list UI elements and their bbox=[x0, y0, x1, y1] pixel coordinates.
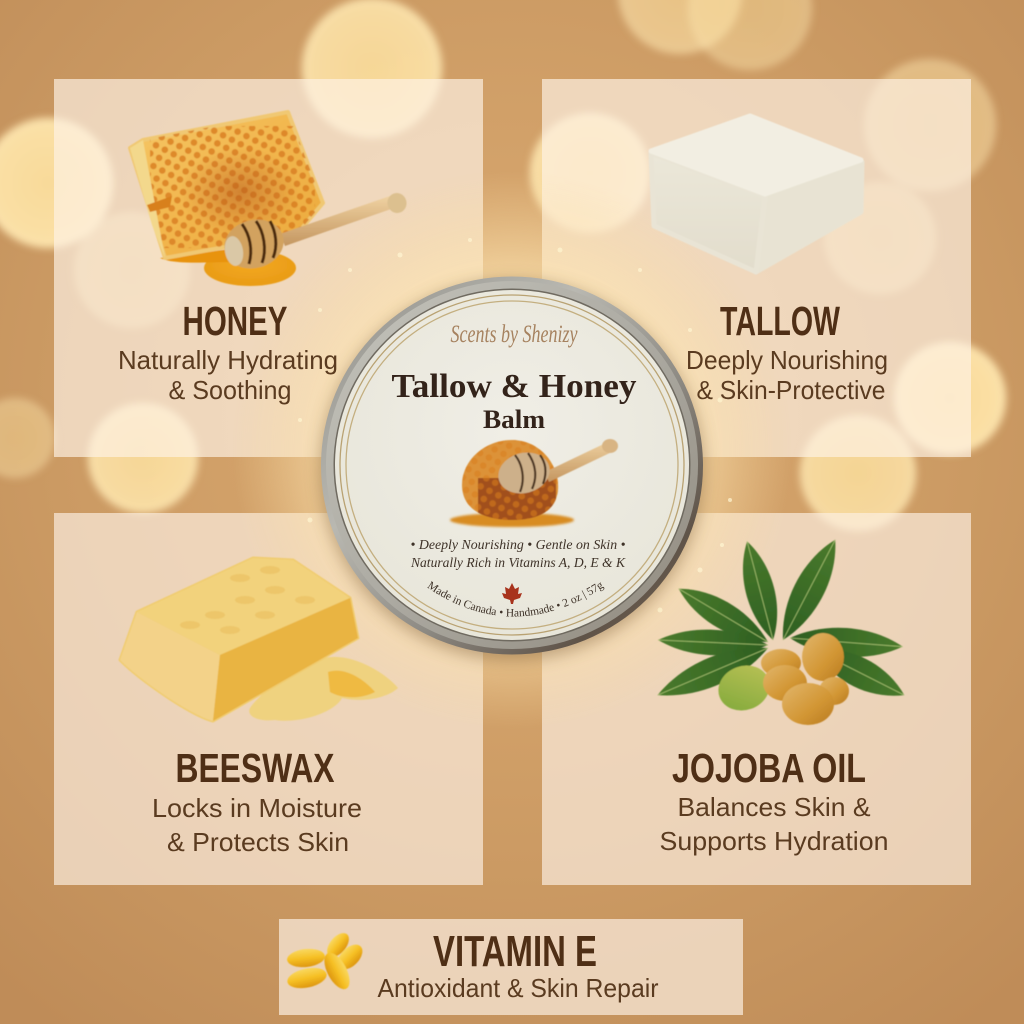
tin rim bbox=[321, 276, 703, 654]
label icon: honeycomb and dipper bbox=[450, 439, 618, 527]
icon: beeswax block bbox=[120, 558, 398, 721]
icon: jojoba leaves and nuts bbox=[652, 533, 911, 725]
text: honey benefit: & Soothing bbox=[168, 375, 292, 405]
text: tallow benefit: & Skin-Protective bbox=[696, 375, 886, 405]
tin label bbox=[335, 290, 689, 640]
heading: beeswax: BEESWAX bbox=[176, 745, 334, 791]
icon: vitamin E capsules bbox=[285, 929, 367, 993]
center glow bbox=[232, 170, 792, 730]
text: tallow benefit: Deeply Nourishing bbox=[686, 345, 888, 375]
label benefits: • Deeply Nourishing • Gentle on Skin • bbox=[410, 537, 626, 552]
label title: Tallow & Honey bbox=[392, 368, 636, 405]
icon: tallow block bbox=[651, 116, 862, 272]
text: beeswax benefit: Locks in Moisture bbox=[152, 793, 362, 823]
product tin bbox=[312, 272, 712, 668]
panel: jojoba oil bbox=[542, 513, 971, 885]
icon: maple leaf bbox=[502, 583, 522, 604]
text: beeswax benefit: & Protects Skin bbox=[167, 827, 349, 857]
text: jojoba benefit: Balances Skin & bbox=[678, 792, 870, 822]
text: honey benefit: Naturally Hydrating bbox=[118, 345, 338, 375]
heading: jojoba oil: JOJOBA OIL bbox=[672, 745, 866, 791]
panel: tallow bbox=[542, 79, 971, 457]
heading: vitamin E: VITAMIN E bbox=[433, 927, 597, 976]
text: beeswax benefit bbox=[152, 793, 362, 857]
sparkles bbox=[298, 238, 732, 612]
bokeh lights bbox=[0, 0, 1006, 531]
label benefits: Naturally Rich in Vitamins A, D, E & K bbox=[410, 555, 626, 570]
text: honey benefit bbox=[118, 345, 338, 405]
panel: honey bbox=[54, 79, 483, 457]
label footer: Made in Canada • Handmade • 2 oz | 57g bbox=[427, 581, 604, 617]
icon: honeycomb and dipper bbox=[130, 112, 409, 286]
text: jojoba benefit bbox=[660, 792, 888, 856]
text: jojoba benefit: Supports Hydration bbox=[660, 826, 888, 856]
label subtitle: Balm bbox=[483, 405, 545, 434]
panel: vitamin E bbox=[279, 919, 743, 1015]
heading: tallow: TALLOW bbox=[720, 298, 840, 344]
heading: honey: HONEY bbox=[182, 298, 288, 344]
text: tallow benefit bbox=[686, 345, 888, 405]
label benefits bbox=[410, 537, 626, 570]
panel: beeswax bbox=[54, 513, 483, 885]
brand: Scents by Shenizy bbox=[450, 321, 578, 348]
text: vitamin E benefit: Antioxidant & Skin Repair bbox=[378, 973, 659, 1003]
